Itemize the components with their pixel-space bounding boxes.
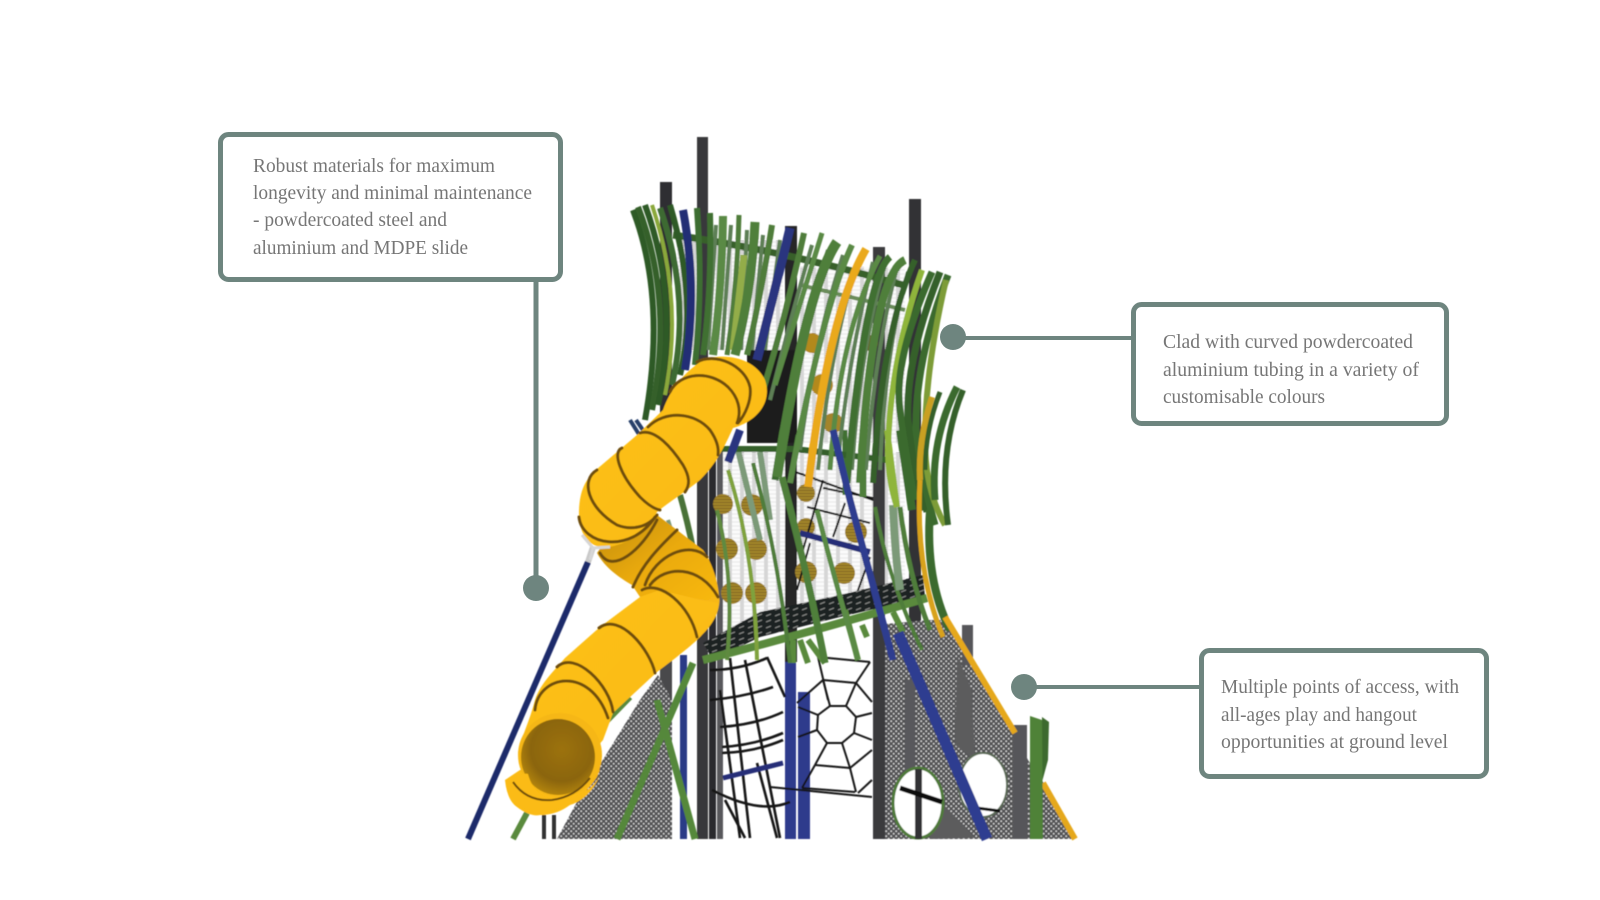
lower cladding tubes bbox=[668, 430, 930, 663]
callout box bbox=[220, 134, 560, 280]
yellow edge trim bbox=[945, 617, 1075, 839]
support posts and diagonal braces bbox=[513, 655, 1027, 839]
callout text: Multiple points of access, with bbox=[1221, 676, 1459, 698]
slide exit rim bbox=[518, 713, 602, 797]
yellow spiral slide bbox=[505, 357, 767, 815]
slide mouth interior bbox=[521, 719, 595, 795]
callout: access points bbox=[1011, 650, 1486, 776]
right lower tube bunch bbox=[919, 387, 963, 637]
mesh netting panels bbox=[677, 240, 905, 640]
callout box bbox=[1134, 304, 1446, 424]
callout: robust materials bbox=[220, 134, 560, 601]
callout text: aluminium and MDPE slide bbox=[253, 237, 468, 259]
slide middle bend bbox=[597, 515, 719, 603]
callout box bbox=[1202, 650, 1486, 776]
callout text bbox=[253, 155, 532, 259]
slide lower section bbox=[518, 570, 719, 790]
callout text: longevity and minimal maintenance bbox=[253, 182, 532, 204]
inner net behind platform bbox=[790, 470, 873, 593]
back layer of cladding tubes bbox=[708, 225, 908, 470]
perforated panel right bbox=[885, 620, 1075, 839]
black mesh platform bbox=[703, 575, 925, 660]
callout text: all-ages play and hangout bbox=[1221, 704, 1417, 726]
blue diagonal tubes bbox=[468, 420, 987, 839]
structural posts bbox=[660, 137, 921, 839]
slide upper section bbox=[579, 357, 767, 547]
round access holes bbox=[893, 753, 1007, 839]
green twin posts bbox=[1030, 716, 1049, 839]
callout text bbox=[1163, 331, 1419, 408]
callout text: Robust materials for maximum bbox=[253, 155, 495, 177]
playground tower illustration bbox=[468, 137, 1075, 839]
leader line and dot bbox=[940, 324, 1133, 350]
callout text: customisable colours bbox=[1163, 386, 1325, 408]
callout text: - powdercoated steel and bbox=[253, 209, 447, 231]
slide bracket bbox=[582, 535, 610, 560]
slide exit lip bbox=[505, 770, 600, 815]
slide ribs bbox=[535, 359, 750, 718]
callout text bbox=[1221, 676, 1459, 753]
leader line and dot bbox=[1011, 674, 1201, 700]
curved cladding tubes bbox=[633, 205, 948, 525]
callout text: Clad with curved powdercoated bbox=[1163, 331, 1413, 353]
slide floor bbox=[507, 774, 600, 811]
perforated panel left bbox=[557, 675, 672, 839]
callout text: opportunities at ground level bbox=[1221, 731, 1448, 753]
callout: curved cladding bbox=[940, 304, 1446, 424]
spider web net bbox=[770, 657, 872, 797]
cargo net cage bbox=[710, 657, 790, 838]
leader line and dot bbox=[523, 280, 549, 601]
horizontal rails bbox=[673, 235, 905, 460]
platform beam and drop tubes bbox=[703, 598, 927, 663]
rope climbing discs bbox=[713, 333, 878, 604]
callout text: aluminium tubing in a variety of bbox=[1163, 359, 1419, 381]
